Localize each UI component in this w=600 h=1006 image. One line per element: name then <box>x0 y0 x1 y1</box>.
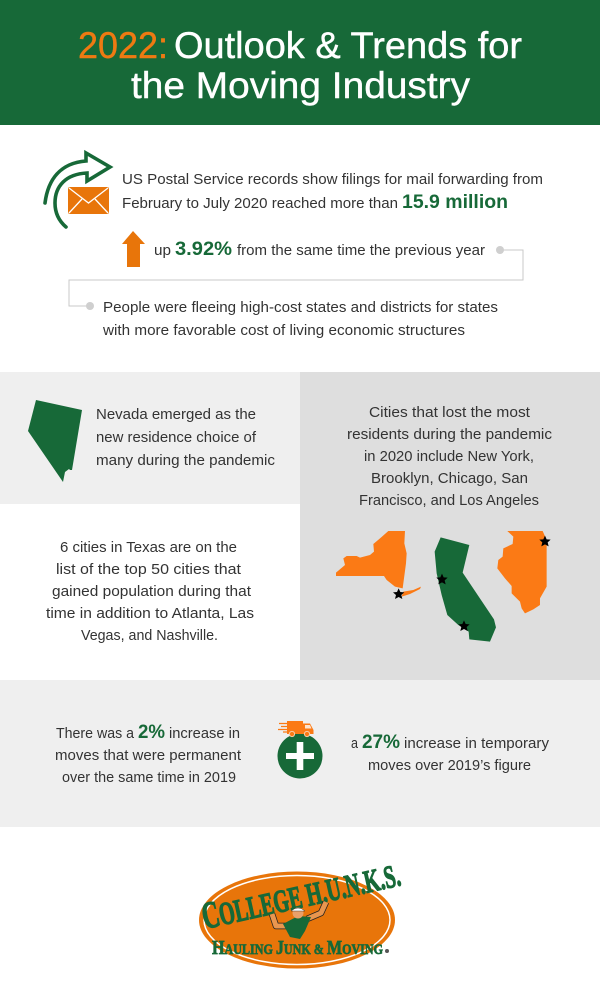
temporary moves text <box>351 731 549 774</box>
permanent moves text: There was a <box>56 725 135 742</box>
cost of living text: with more favorable cost of living economic structures <box>102 322 465 339</box>
header banner <box>0 0 600 125</box>
panel: moves comparison <box>0 680 600 827</box>
logo registered mark <box>385 949 389 953</box>
year-over-year increase text: up <box>154 242 171 259</box>
title: the Moving Industry <box>131 65 471 106</box>
panel: Texas cities text <box>46 539 254 644</box>
temporary moves text: a <box>351 735 359 752</box>
panel: Texas cities text: list of the top 50 cities that <box>56 561 242 578</box>
logo mascot <box>272 902 326 939</box>
panel: Texas cities text: gained population during that <box>52 583 252 600</box>
temporary moves text: 27% <box>362 731 400 753</box>
map: New York <box>336 531 421 597</box>
Nevada text <box>96 406 275 469</box>
panel: cities that lost residents <box>300 372 600 680</box>
Nevada text: many during the pandemic <box>96 452 275 469</box>
permanent moves text: over the same time in 2019 <box>62 769 236 786</box>
city stars <box>393 536 551 631</box>
year-over-year increase text: from the same time the previous year <box>237 242 485 259</box>
cities text: Cities that lost the most <box>369 404 531 421</box>
cities text: in 2020 include New York, <box>364 448 534 465</box>
cities text: residents during the pandemic <box>347 426 552 443</box>
icon: up arrow <box>122 231 145 267</box>
title: 2022: <box>78 25 168 66</box>
logo: College H.U.N.K.S. <box>198 853 404 968</box>
title <box>78 25 522 106</box>
cities text: Brooklyn, Chicago, San <box>371 470 528 487</box>
permanent moves text <box>55 721 242 786</box>
cost of living text: People were fleeing high-cost states and districts for states <box>103 299 498 316</box>
temporary moves text: moves over 2019’s figure <box>368 757 531 774</box>
logo wordmark: COLLEGE H.U.N.K.S. <box>198 853 404 938</box>
permanent moves text: moves that were permanent <box>55 747 242 764</box>
panel: Texas cities text: Vegas, and Nashville. <box>81 627 218 644</box>
map: Illinois <box>497 531 547 613</box>
icon: moving truck and plus <box>278 721 322 778</box>
icon: Nevada state <box>28 400 82 482</box>
permanent moves text: 2% <box>138 721 165 743</box>
Nevada text: Nevada emerged as the <box>96 406 256 423</box>
year-over-year increase text <box>154 238 485 260</box>
icon: mail forwarding envelope and arrow <box>45 153 110 227</box>
cities text <box>347 404 552 509</box>
temporary moves text: increase in temporary <box>404 735 549 752</box>
year-over-year increase text: 3.92% <box>175 238 232 260</box>
connector line <box>69 246 523 310</box>
postal service statistic text: US Postal Service records show filings for mail forwarding from <box>122 171 543 188</box>
cities text: Francisco, and Los Angeles <box>359 492 539 509</box>
logo tagline: HAULING JUNK & MOVING <box>212 937 383 959</box>
postal service statistic text <box>122 171 543 213</box>
panel: Texas cities text: 6 cities in Texas are on the <box>60 539 237 556</box>
permanent moves text: increase in <box>169 725 240 742</box>
cost of living text <box>102 299 498 339</box>
panel: Texas cities text: time in addition to Atlanta, Las <box>46 605 254 622</box>
Nevada text: new residence choice of <box>96 429 257 446</box>
postal service statistic text: 15.9 million <box>402 191 508 213</box>
state maps with stars <box>336 531 551 642</box>
panel: Nevada <box>0 372 300 504</box>
map: California <box>435 537 496 642</box>
postal service statistic text: February to July 2020 reached more than <box>122 195 398 212</box>
title: Outlook & Trends for <box>174 25 522 66</box>
